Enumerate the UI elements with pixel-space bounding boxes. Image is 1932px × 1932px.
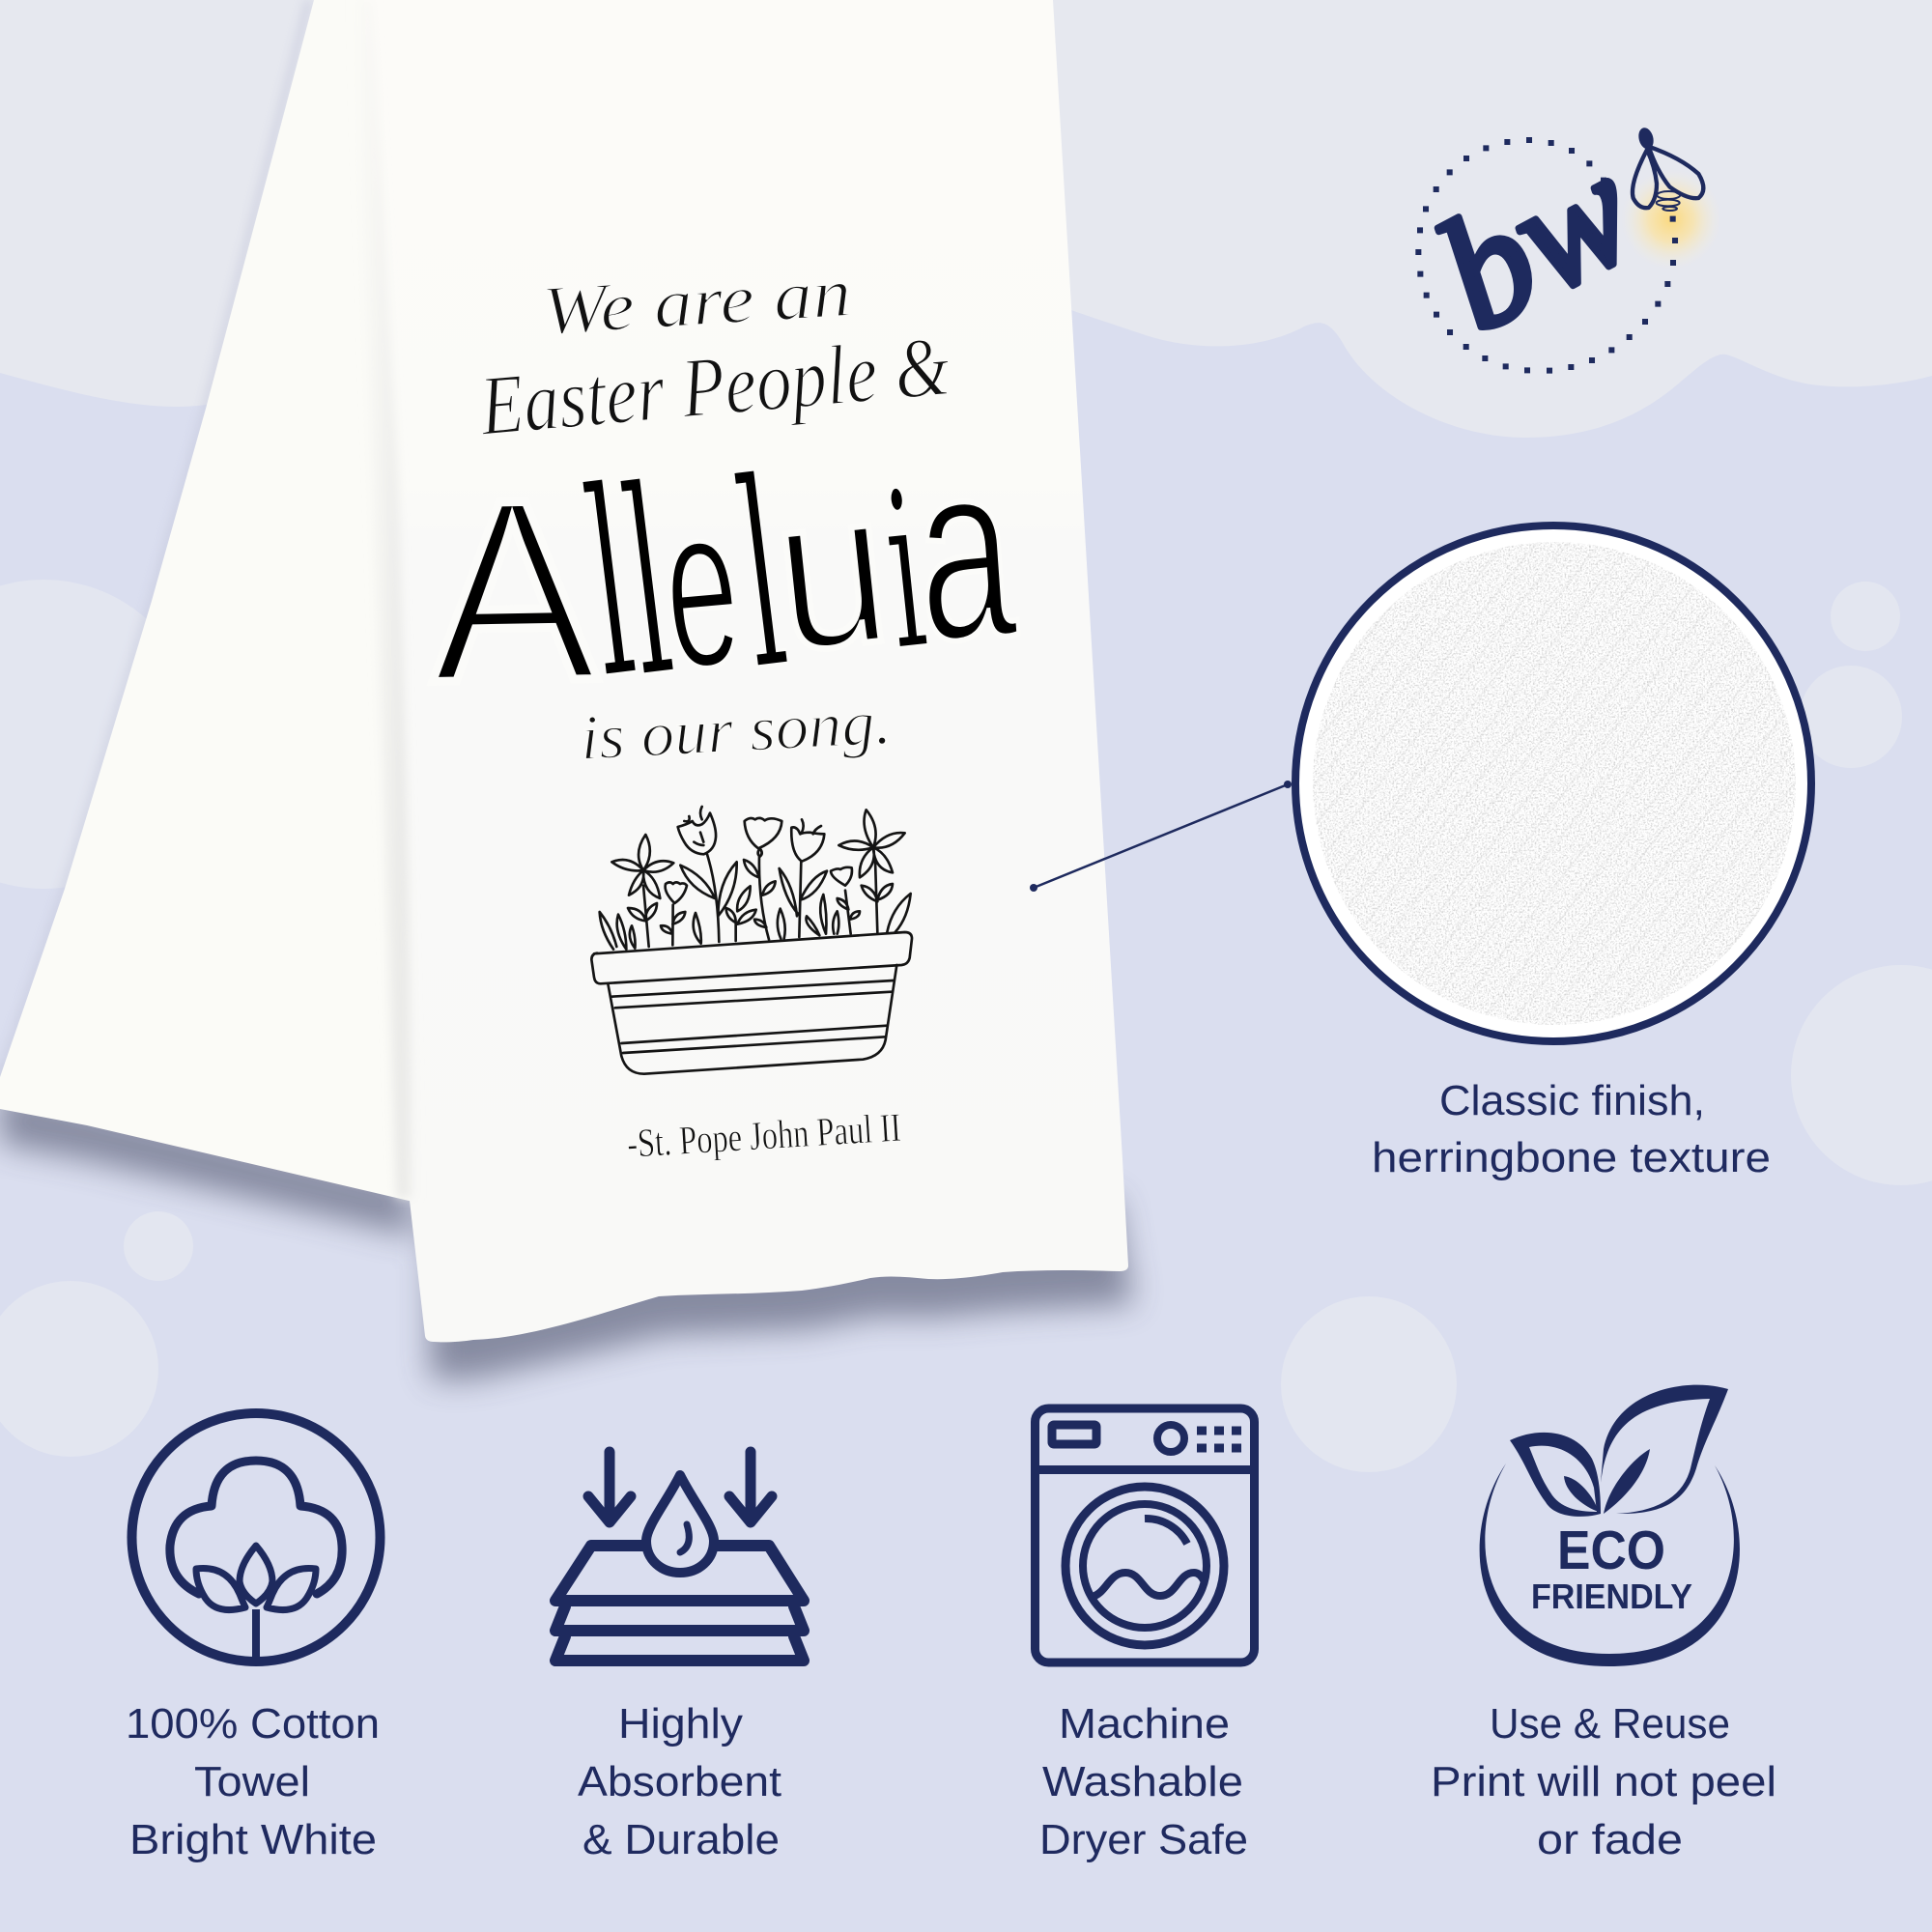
washable label (1039, 1700, 1248, 1863)
background bubbles (0, 580, 1932, 1472)
washable label: Washable (1042, 1758, 1243, 1805)
cotton label: Bright White (129, 1816, 377, 1863)
eco label: Use & Reuse (1490, 1700, 1730, 1747)
swatch caption: herringbone texture (1372, 1134, 1771, 1181)
towel print: Alleluia headline: l (725, 425, 799, 727)
logo monogram: bw (1410, 118, 1662, 366)
feature: 100% cotton (126, 1413, 381, 1863)
towel: folded back panel (0, 0, 421, 1204)
towel fold crease (353, 0, 417, 1198)
feature: absorbent (555, 1452, 804, 1863)
icon: water drop over stacked layers (555, 1452, 804, 1661)
cotton label: Towel (194, 1758, 310, 1805)
absorbent label (578, 1700, 781, 1863)
swatch caption (1372, 1077, 1771, 1181)
flowers and leaves (600, 807, 911, 950)
towel print: Alleluia headline: A (428, 444, 600, 737)
logo dotted circle (1418, 140, 1675, 371)
absorbent label: Absorbent (578, 1758, 781, 1805)
logo: bw monogram with firefly trail (1410, 118, 1721, 371)
icon: eco badge: FRIENDLY (1531, 1577, 1692, 1616)
feature: machine washable (1035, 1408, 1254, 1863)
towel print: quote line one: We are an (540, 254, 853, 350)
feature: eco friendly (1431, 1385, 1776, 1863)
absorbent label: & Durable (582, 1816, 780, 1863)
icon: eco badge (1480, 1385, 1740, 1666)
logo firefly (1633, 126, 1703, 211)
cotton label: 100% Cotton (126, 1700, 380, 1747)
icon: cotton boll (131, 1413, 381, 1662)
logo glow (1621, 169, 1721, 270)
towel print: Alleluia headline: i (874, 444, 935, 699)
absorbent label: Highly (618, 1700, 743, 1747)
towel print: quote line two: Easter People & (475, 320, 953, 454)
towel print: Alleluia headline: u (764, 441, 899, 697)
washable label: Machine (1059, 1700, 1230, 1747)
towel print: Alleluia headline: l (574, 434, 647, 736)
towel edge shading (0, 0, 309, 1077)
towel print: Alleluia headline (428, 407, 1023, 737)
towel print: attribution: -St. Pope John Paul II (626, 1106, 902, 1167)
eco label: or fade (1537, 1816, 1683, 1863)
swatch ring (1295, 526, 1811, 1041)
cotton label (126, 1700, 380, 1863)
towel drop shadow (0, 1088, 1133, 1380)
icon: eco badge: ECO (1557, 1520, 1665, 1581)
towel print: Alleluia headline: l (611, 433, 685, 735)
towel: front panel (364, 0, 1128, 1342)
icon: washing machine (1035, 1408, 1254, 1662)
pot (591, 932, 912, 1074)
swatch fabric texture (1313, 542, 1796, 1025)
background: upper cloud band (0, 0, 1932, 438)
eco label: Print will not peel (1431, 1758, 1776, 1805)
eco label (1431, 1700, 1776, 1863)
fabric swatch callout (1030, 526, 1811, 1181)
towel print: Alleluia headline: a (907, 407, 1023, 695)
towel print: is our song: is our song. (579, 687, 893, 774)
connector line (1030, 781, 1292, 892)
washable label: Dryer Safe (1039, 1816, 1248, 1863)
swatch caption: Classic finish, (1439, 1077, 1705, 1124)
towel print: Alleluia headline: e (654, 455, 749, 719)
towel print: flower pot illustration (591, 807, 912, 1074)
